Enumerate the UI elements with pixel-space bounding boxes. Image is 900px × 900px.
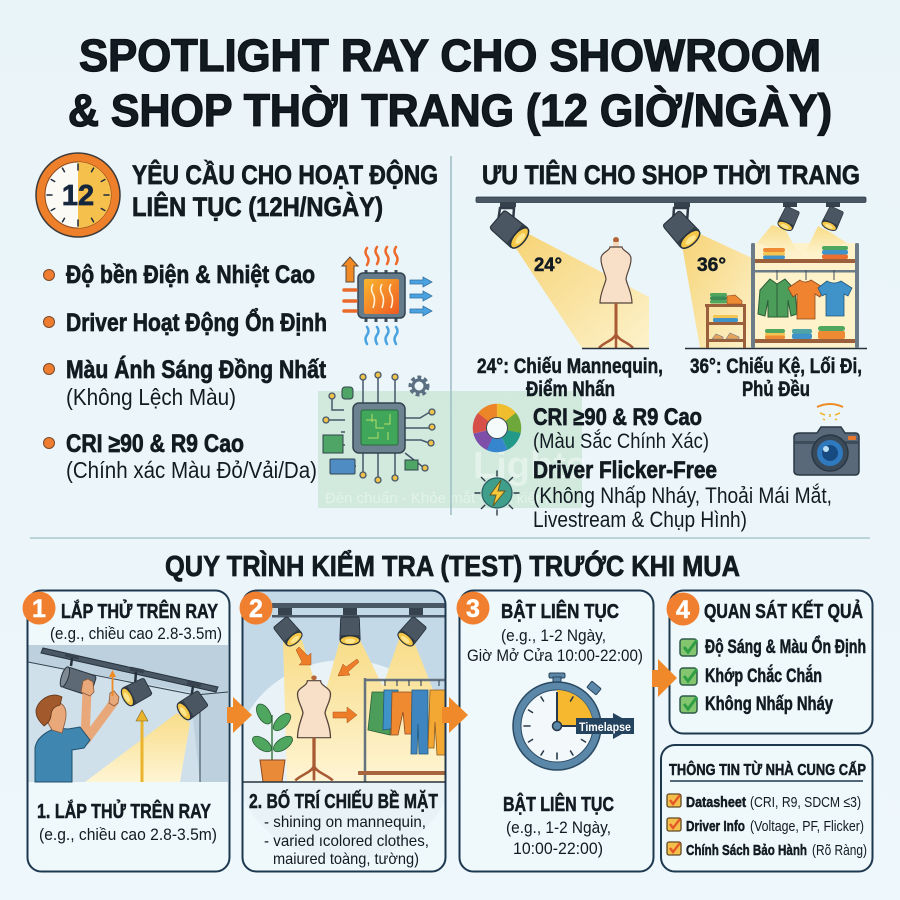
light beam 24 degree bbox=[515, 233, 649, 348]
step 2 caption: 2. BỐ TRÍ CHIẾU BỀ MẶT bbox=[249, 789, 438, 813]
heading: requirements: YÊU CẦU CHO HOẠT ĐỘNG bbox=[132, 159, 438, 190]
step 1 caption: 1. LẮP THỬ TRÊN RAY bbox=[37, 799, 212, 823]
step 3 caption: BẬT LIÊN TỤC bbox=[503, 792, 614, 816]
step 1 caption: (e.g., chiều cao 2.8-3.5m) bbox=[39, 825, 217, 844]
supplier item: driver info: (Voltage, PF, Flicker) bbox=[750, 818, 864, 835]
check item 3: Không Nhấp Nháy bbox=[705, 694, 833, 715]
step 3 heading: BẬT LIÊN TỤC bbox=[501, 599, 619, 623]
badge 1: 1 bbox=[32, 595, 46, 623]
beam angle labels: 24° bbox=[534, 255, 562, 276]
small display shelf bbox=[705, 293, 746, 348]
bullet 4 bbox=[44, 430, 317, 483]
shelf back glow bbox=[752, 243, 858, 348]
clothes rack bbox=[358, 678, 448, 782]
check item 2: Khớp Chắc Chắn bbox=[705, 665, 822, 687]
spotlight held by hand bbox=[58, 666, 97, 696]
bullet 2: Driver Hoạt Động Ổn Định bbox=[66, 307, 327, 337]
folded clothes top bbox=[763, 246, 848, 259]
panel: step 2 bbox=[235, 590, 455, 872]
timelapse tag: Timelapse bbox=[579, 720, 631, 734]
step 3 caption: 10:00-22:00) bbox=[513, 839, 603, 858]
panel: step 1 bbox=[28, 590, 230, 872]
text: driver flicker-free: Driver Flicker-Free bbox=[533, 457, 717, 484]
step 2 caption: - shining on mannequin, bbox=[264, 814, 426, 831]
bullet 3: Màu Ánh Sáng Đồng Nhất bbox=[66, 355, 327, 384]
check item 2 bbox=[680, 665, 822, 687]
badge 3: 3 bbox=[466, 595, 480, 623]
orange direction arrows bbox=[296, 647, 359, 723]
up arrows bbox=[140, 720, 144, 782]
bullet 4: (Chính xác Màu Đỏ/Vải/Da) bbox=[66, 457, 317, 483]
icon: camera bbox=[794, 404, 859, 475]
orange tee bbox=[788, 280, 824, 319]
beam captions: 36°: Chiếu Kệ, Lối Đi, bbox=[690, 355, 862, 378]
watermark: Đèn chuẩn - Khỏe mắt - Tiết kiệm bbox=[325, 490, 548, 507]
bullet 3 bbox=[44, 355, 327, 410]
arrow: step 2 to 3 bbox=[442, 697, 468, 733]
text: driver flicker-free: Livestream & Chụp Hình) bbox=[533, 507, 747, 532]
text: CRI bbox=[533, 404, 709, 453]
step 3 caption: (e.g., 1-2 Ngày, bbox=[506, 818, 611, 837]
bullet 3: (Không Lệch Màu) bbox=[66, 384, 236, 410]
step 1 heading bbox=[50, 599, 222, 643]
text: CRI: CRI ≥90 & R9 Cao bbox=[533, 404, 702, 431]
text: driver flicker-free bbox=[533, 457, 832, 532]
step 2 caption bbox=[249, 789, 438, 868]
icon: heat chip bbox=[342, 247, 432, 344]
arrow: step 1 to 2 bbox=[227, 697, 252, 733]
icon: 12 hour clock bbox=[36, 153, 120, 237]
arrow: step 3 to 4 bbox=[652, 659, 677, 697]
mannequin bbox=[599, 237, 633, 348]
number badges bbox=[22, 592, 700, 626]
beam angle labels bbox=[534, 255, 726, 276]
badge 2 bbox=[240, 592, 272, 624]
light beams over shelf bbox=[757, 225, 847, 257]
badge 1 bbox=[22, 592, 56, 624]
title: & SHOP THỜI TRANG (12 GIỜ/NGÀY) bbox=[68, 85, 832, 136]
step 3 heading: Giờ Mở Cửa 10:00-22:00) bbox=[467, 646, 643, 665]
illustration: installing on track bbox=[28, 645, 228, 782]
step 2 caption: - varied ıcolored clothes, bbox=[264, 833, 429, 850]
supplier item: warranty: (Rõ Ràng) bbox=[812, 842, 867, 859]
step 2 caption: maiured toàng, tường) bbox=[273, 851, 419, 868]
supplier item: warranty: Chính Sách Bảo Hành bbox=[686, 842, 807, 859]
blue tee bbox=[818, 281, 852, 316]
heading: test process: QUY TRÌNH KIỂM TRA (TEST) TRƯỚC KHI MUA bbox=[165, 549, 740, 583]
check item 3 bbox=[680, 694, 833, 715]
step 3 caption bbox=[503, 792, 614, 858]
plant bbox=[252, 704, 293, 782]
title bbox=[68, 30, 832, 136]
hoodie bbox=[758, 279, 797, 317]
icon: stopwatch bbox=[513, 673, 634, 770]
badge 3 bbox=[456, 592, 490, 624]
beam captions: Phủ Đều bbox=[742, 378, 810, 401]
step 3 heading: (e.g., 1-2 Ngày, bbox=[501, 626, 606, 645]
spotlights on track bbox=[489, 202, 844, 252]
person bbox=[35, 679, 119, 782]
beam captions: Điểm Nhấn bbox=[526, 378, 615, 401]
badge 4: 4 bbox=[676, 596, 690, 624]
supplier item: datasheet: Datasheet bbox=[686, 794, 746, 811]
icon: circuit chip bbox=[323, 372, 435, 483]
bullet 1: Độ bền Điện & Nhiệt Cao bbox=[66, 261, 315, 289]
step 1 heading: LẮP THỬ TRÊN RAY bbox=[61, 599, 219, 623]
requirements list bbox=[44, 261, 327, 483]
icon: 12 hour clock: 12 bbox=[62, 180, 94, 212]
icon: colour wheel bbox=[472, 403, 522, 453]
hangers bbox=[777, 270, 834, 280]
title: SPOTLIGHT RAY CHO SHOWROOM bbox=[79, 30, 821, 81]
track rail bbox=[476, 197, 866, 202]
mannequin bbox=[295, 675, 333, 780]
folded clothes bottom bbox=[765, 326, 845, 339]
supplier item: driver info bbox=[667, 818, 864, 835]
heading: requirements: LIÊN TỤC (12H/NGÀY) bbox=[132, 191, 383, 222]
supplier item: datasheet bbox=[667, 794, 861, 811]
text: CRI: (Màu Sắc Chính Xác) bbox=[533, 430, 709, 453]
step 4 heading: QUAN SÁT KẾT QUẢ bbox=[704, 600, 863, 623]
step 3 heading bbox=[467, 599, 643, 665]
badge 2: 2 bbox=[249, 595, 263, 623]
panel: supplier information bbox=[661, 745, 872, 872]
panel: step 3 bbox=[460, 590, 654, 872]
divider lines bbox=[450, 156, 452, 515]
watermark bbox=[318, 391, 587, 508]
supplier item: driver info: Driver Info bbox=[686, 818, 745, 835]
badge 4 bbox=[666, 592, 700, 626]
clothing shelf bbox=[751, 243, 859, 348]
watermark: Lights bbox=[473, 445, 587, 487]
icon: flicker free bolt bbox=[475, 471, 519, 515]
step 1 heading: (e.g., chiều cao 2.8-3.5m) bbox=[50, 624, 222, 643]
beam captions bbox=[477, 355, 862, 401]
supplier item: datasheet: (CRI, R9, SDCM ≤3) bbox=[750, 794, 861, 811]
panel: step 4 bbox=[670, 590, 872, 734]
light beam 36 degree bbox=[682, 233, 752, 348]
text: driver flicker-free: (Không Nhấp Nháy, Thoải Mái Mắt, bbox=[533, 483, 832, 508]
floor lines bbox=[582, 348, 867, 350]
beam captions: 24°: Chiếu Mannequin, bbox=[477, 355, 663, 378]
heading: requirements bbox=[132, 159, 438, 222]
step 1 caption bbox=[37, 799, 217, 844]
bullet 4: CRI ≥90 & R9 Cao bbox=[66, 430, 244, 458]
illustration: surface layout bbox=[244, 592, 444, 782]
beam angle labels: 36° bbox=[697, 255, 726, 276]
